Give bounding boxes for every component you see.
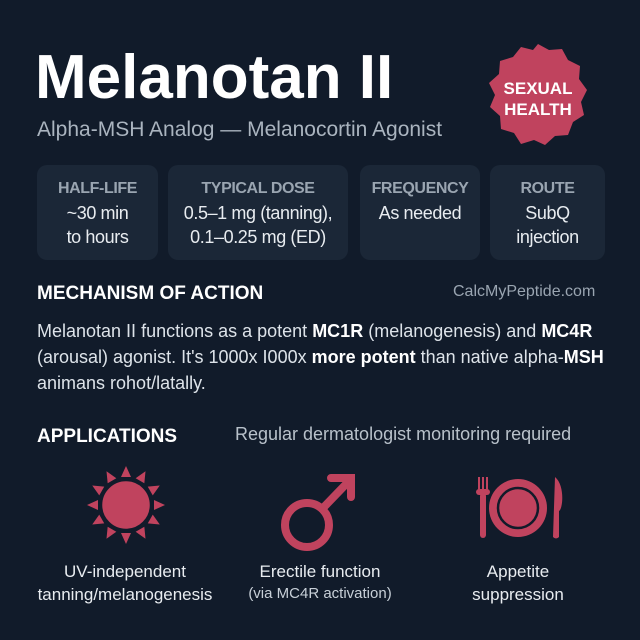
icon: male symbol	[281, 474, 355, 551]
card: typical dose: 0.1–0.25 mg (ED)	[190, 227, 326, 247]
mechanism text: Melanotan II functions as a potent MC1R (melanogenesis) and MC4R (arousal) agonist. It's 1000x I000x more potent than native alpha-MSH animans rohot/latally.	[37, 321, 604, 393]
badge: sexual health	[489, 44, 587, 145]
label: erectile	[248, 562, 392, 602]
icon: plate and cutlery	[476, 477, 562, 538]
label: erectile: (via MC4R activation)	[248, 585, 392, 602]
card: half-life: to hours	[67, 227, 128, 247]
card: route: injection	[516, 227, 579, 247]
label: tanning: tanning/melanogenesis	[38, 585, 212, 604]
label: appetite: Appetite	[487, 562, 549, 581]
card: route: ROUTE	[520, 180, 574, 197]
note: Regular dermatologist monitoring required	[235, 424, 571, 444]
card: half-life	[37, 165, 158, 260]
card: frequency	[360, 165, 480, 260]
card: half-life: HALF-LIFE	[58, 180, 137, 197]
badge: sexual health: SEXUAL	[504, 79, 572, 98]
heading: mechanism: MECHANISM OF ACTION	[37, 283, 263, 304]
label: erectile: Erectile function	[260, 562, 380, 581]
card: typical dose: 0.5–1 mg (tanning),	[184, 203, 332, 223]
icon: sun	[87, 466, 165, 544]
badge: sexual health: HEALTH	[504, 100, 572, 119]
watermark: CalcMyPeptide.com	[453, 283, 595, 300]
title: Melanotan II	[35, 43, 393, 112]
subtitle: Alpha-MSH Analog — Melanocortin Agonist	[37, 118, 442, 141]
card: typical dose: TYPICAL DOSE	[201, 180, 315, 197]
card: route: SubQ	[525, 203, 570, 223]
card: frequency: As needed	[379, 203, 461, 223]
card: typical dose	[168, 165, 348, 260]
label: appetite: suppression	[472, 585, 564, 604]
card: half-life: ~30 min	[67, 203, 128, 223]
label: tanning: UV-independent	[64, 562, 186, 581]
heading: applications: APPLICATIONS	[37, 426, 177, 447]
label: tanning	[38, 562, 212, 604]
card: route	[490, 165, 605, 260]
label: appetite	[472, 562, 564, 604]
card: frequency: FREQUENCY	[372, 180, 468, 197]
